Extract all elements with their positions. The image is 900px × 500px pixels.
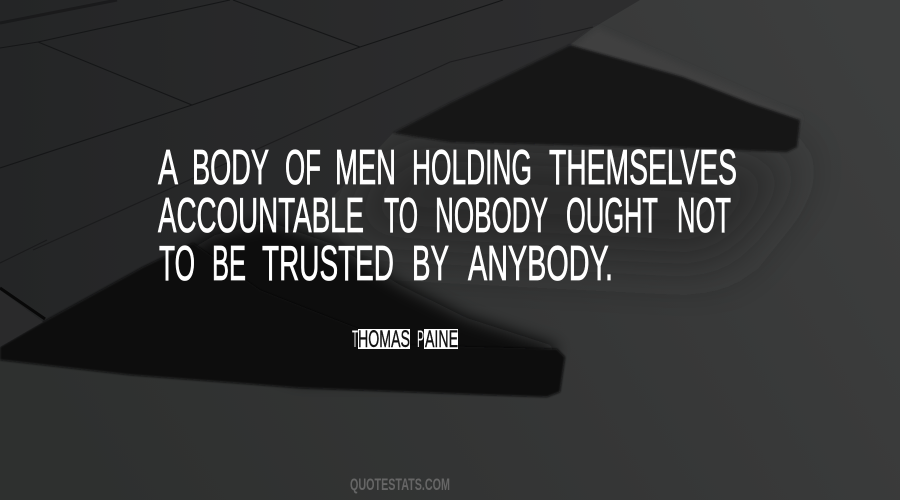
line 1: MEN: [335, 141, 396, 195]
line 1: BODY: [192, 141, 269, 195]
line 1: THEMSELVES: [549, 141, 737, 195]
watermark: QUOTESTATS.COM: [350, 475, 450, 494]
line 3: TRUSTED: [262, 237, 394, 291]
author name: T: [352, 326, 358, 353]
line 2: [158, 189, 731, 243]
line 1: [158, 141, 737, 195]
line 2: OUGHT: [566, 189, 658, 243]
line 2: TO: [384, 189, 418, 243]
line 2: ACCOUNTABLE: [158, 189, 364, 243]
line 2: NOBODY: [435, 189, 548, 243]
line 1: OF: [285, 141, 321, 195]
author name: AINE: [425, 326, 458, 353]
line 3: ANYBODY.: [468, 237, 613, 291]
line 3: BY: [412, 237, 449, 291]
line 3: BE: [212, 237, 246, 291]
line 1: A: [158, 141, 178, 195]
author name: P: [417, 326, 424, 353]
line 3: TO: [159, 237, 195, 291]
author name: HOMAS: [358, 326, 410, 353]
quote text: [158, 141, 737, 291]
line 3: [159, 237, 613, 291]
line 1: HOLDING: [412, 141, 532, 195]
line 2: NOT: [677, 189, 731, 243]
